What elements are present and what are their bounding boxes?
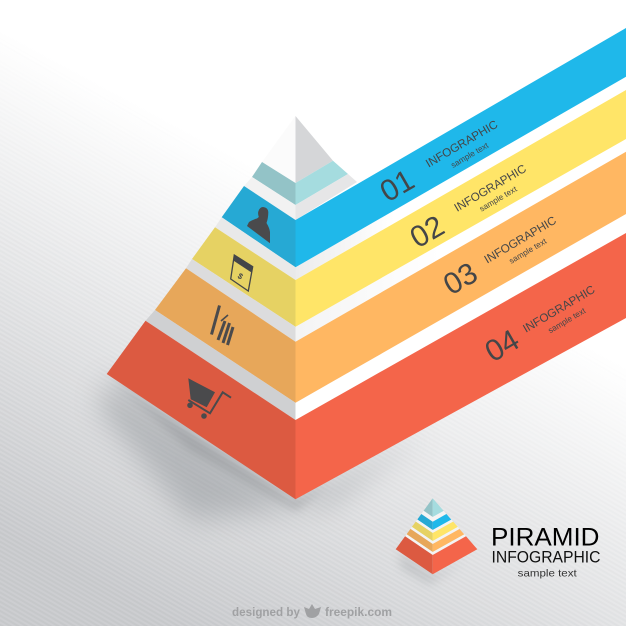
tier 2: yellow (192, 90, 626, 327)
label 01: INFOGRAPHIC (424, 118, 500, 170)
pyramid shadow (100, 376, 430, 520)
tier 1: blue (222, 28, 626, 267)
sample text: sample text (518, 568, 577, 580)
heading: INFOGRAPHIC: INFOGRAPHIC (492, 548, 601, 566)
sample text 01: sample text (449, 141, 491, 170)
tier 3: orange (155, 152, 626, 403)
credit (232, 604, 392, 619)
upper separator right (296, 174, 357, 220)
logo pyramid (396, 498, 477, 584)
credit: designed by: designed by (232, 607, 301, 619)
icon: calendar: $ (236, 271, 245, 282)
label 02: INFOGRAPHIC (452, 162, 529, 215)
icon: calendar (231, 255, 253, 291)
label 03: INFOGRAPHIC (482, 214, 559, 266)
white gaps between ribbons (296, 77, 626, 420)
sample text 02: sample text (478, 184, 519, 214)
tier 4: red (107, 233, 626, 499)
yellow ribbon (296, 90, 626, 327)
red left face (107, 321, 296, 499)
credit: freepik.com: freepik.com (325, 607, 392, 619)
number 04: 04 (480, 323, 525, 369)
blue ribbon (296, 28, 626, 267)
sample text 04: sample text (547, 306, 588, 335)
teal tier left face (252, 162, 296, 205)
number 01: 01 (375, 163, 420, 209)
red ribbon (296, 233, 626, 499)
yellow left face (192, 227, 296, 327)
label 04: INFOGRAPHIC (521, 283, 597, 336)
separator left (186, 259, 296, 342)
icon: shopping cart (187, 378, 231, 419)
teal tier right face (296, 161, 348, 205)
logo title (491, 524, 601, 580)
icon: person (247, 207, 270, 243)
tip right face (296, 116, 333, 183)
separator left (146, 310, 296, 420)
icon: bar chart (212, 306, 233, 345)
separator left (215, 217, 296, 280)
blue left face (222, 186, 296, 267)
number 02: 02 (405, 209, 450, 255)
number 03: 03 (438, 256, 483, 302)
upper separator left (244, 177, 296, 220)
sample text 03: sample text (508, 236, 549, 266)
heading: PIRAMID: PIRAMID (491, 524, 600, 552)
orange ribbon (296, 152, 626, 403)
pyramid tip (244, 116, 357, 220)
tip left face (262, 116, 296, 183)
icon: freepik crown (304, 604, 321, 618)
orange left face (155, 268, 296, 403)
